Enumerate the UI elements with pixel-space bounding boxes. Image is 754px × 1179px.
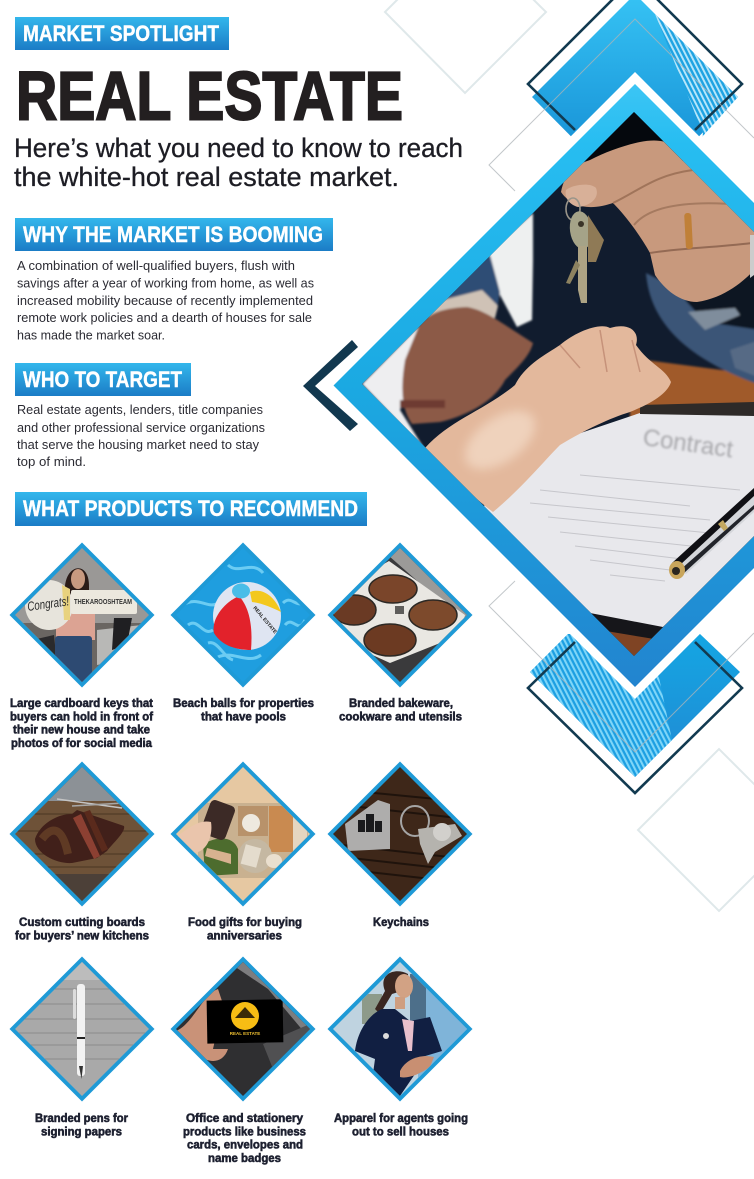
text block: who to target: that serve the housing market need to stay <box>17 438 260 452</box>
photo: woman with cardboard key: THEKAROOSHTEAM <box>74 599 132 606</box>
heading tag: market spotlight: MARKET SPOTLIGHT <box>23 21 219 46</box>
bottom blue chevron with stripes <box>530 634 740 777</box>
caption <box>334 1113 468 1138</box>
caption: name badges <box>208 1153 281 1165</box>
product: apparel <box>328 956 472 1138</box>
photo: muffin tin <box>328 542 472 688</box>
caption: signing papers <box>41 1126 122 1138</box>
caption <box>188 917 302 942</box>
photo: agent in navy blazer <box>328 956 472 1102</box>
text block: why the market is booming: remote work policies and a dearth of houses for sale <box>17 311 312 325</box>
caption: buyers can hold in front of <box>10 712 153 724</box>
subtitle: the white-hot real estate market. <box>14 162 399 192</box>
text block: who to target: top of mind. <box>17 455 86 469</box>
caption: their new house and take <box>13 724 150 736</box>
product: branded pens <box>10 956 154 1138</box>
top blue chevron with stripes <box>532 0 738 201</box>
product: bakeware <box>328 542 472 724</box>
photo: blurred white strip, sleeve and left hand <box>362 213 533 450</box>
caption: Keychains <box>373 917 429 929</box>
product: office and stationery <box>170 956 316 1165</box>
photo: lower open hand <box>425 326 671 512</box>
text block: who to target: Real estate agents, lenders, title companies <box>17 403 263 417</box>
heading tag: who to target: WHO TO TARGET <box>23 367 182 392</box>
caption <box>183 1113 306 1165</box>
caption: cookware and utensils <box>339 712 462 724</box>
heading tag: market spotlight <box>15 17 229 50</box>
thin grey line top <box>489 19 754 191</box>
decorative pale outline diamond, bottom right <box>638 749 754 911</box>
dark bracket arrow <box>303 340 358 431</box>
caption <box>15 917 149 942</box>
heading tag: what products to recommend <box>15 492 367 526</box>
text block: why the market is booming: increased mobility because of recently implemented <box>17 294 313 308</box>
caption <box>173 698 314 724</box>
photo: woman with cardboard key <box>10 542 154 688</box>
heading tag: why the market is booming: WHY THE MARKET IS BOOMING <box>23 222 323 247</box>
caption: out to sell houses <box>352 1126 449 1138</box>
caption: Custom cutting boards <box>19 917 145 929</box>
product: keychains <box>328 762 472 929</box>
decorative pale outline diamond, top <box>385 0 546 93</box>
text block: why the market is booming <box>17 259 314 342</box>
dark outline bottom chevron <box>528 642 742 793</box>
text block: why the market is booming: A combination of well-qualified buyers, flush with <box>17 259 295 273</box>
caption: Branded bakeware, <box>349 698 453 710</box>
photo: food gift box <box>170 762 316 906</box>
main photo: keys changing hands over a contract <box>362 112 754 660</box>
caption <box>10 698 153 750</box>
caption: that have pools <box>201 712 286 724</box>
thin grey line bottom <box>489 581 754 752</box>
caption: Branded pens for <box>35 1113 129 1125</box>
title: REAL ESTATE <box>16 58 403 134</box>
caption: Beach balls for properties <box>173 698 314 710</box>
heading tag: what products to recommend: WHAT PRODUCTS TO RECOMMEND <box>23 496 358 521</box>
photo: right sleeve and wood table <box>630 268 754 420</box>
photo: top hand holding keys <box>561 140 754 302</box>
caption: products like business <box>183 1126 306 1138</box>
photo: metal house keychain <box>328 762 472 906</box>
photo: white pen on wood <box>10 956 154 1102</box>
photo: hand holding black business card: REAL ESTATE <box>230 1031 260 1036</box>
caption: cards, envelopes and <box>187 1140 303 1152</box>
heading tag: who to target <box>15 363 191 396</box>
photo: woman with cardboard key: Congrats! <box>26 593 70 614</box>
product: food gifts <box>170 762 316 942</box>
photo: hand holding black business card <box>170 956 316 1102</box>
photo: keys <box>566 198 604 303</box>
caption: Office and stationery <box>186 1113 304 1125</box>
caption: Food gifts for buying <box>188 917 302 929</box>
main photo blue frame <box>334 84 754 687</box>
heading tag: why the market is booming <box>15 218 333 251</box>
caption <box>339 698 462 724</box>
caption: for buyers’ new kitchens <box>15 930 149 942</box>
photo: contract paper, clipboard and pen <box>480 402 754 660</box>
product: cardboard keys <box>10 542 154 750</box>
product: beach balls <box>170 542 316 724</box>
caption: Large cardboard keys that <box>10 698 153 710</box>
product: cutting boards <box>10 762 154 942</box>
subtitle: Here’s what you need to know to reach <box>14 133 463 163</box>
text block: who to target: and other professional service organizations <box>17 421 265 435</box>
text block: who to target <box>17 403 265 469</box>
subtitle <box>14 133 463 192</box>
photo: contract paper, clipboard and pen: Contract <box>641 424 735 464</box>
photo: beach ball in pool: REAL ESTATE <box>251 605 278 636</box>
text block: why the market is booming: savings after a year of working from home, as well as <box>17 276 314 290</box>
white halo around main photo frame <box>322 72 754 699</box>
caption: Apparel for agents going <box>334 1113 468 1125</box>
caption <box>35 1113 129 1138</box>
photo: steak on cutting board <box>10 762 154 906</box>
dark outline top chevron <box>528 0 742 130</box>
photo: beach ball in pool <box>170 542 316 688</box>
caption: anniversaries <box>207 930 282 942</box>
text block: why the market is booming: has made the market soar. <box>17 328 165 342</box>
caption: photos of for social media <box>11 738 153 750</box>
